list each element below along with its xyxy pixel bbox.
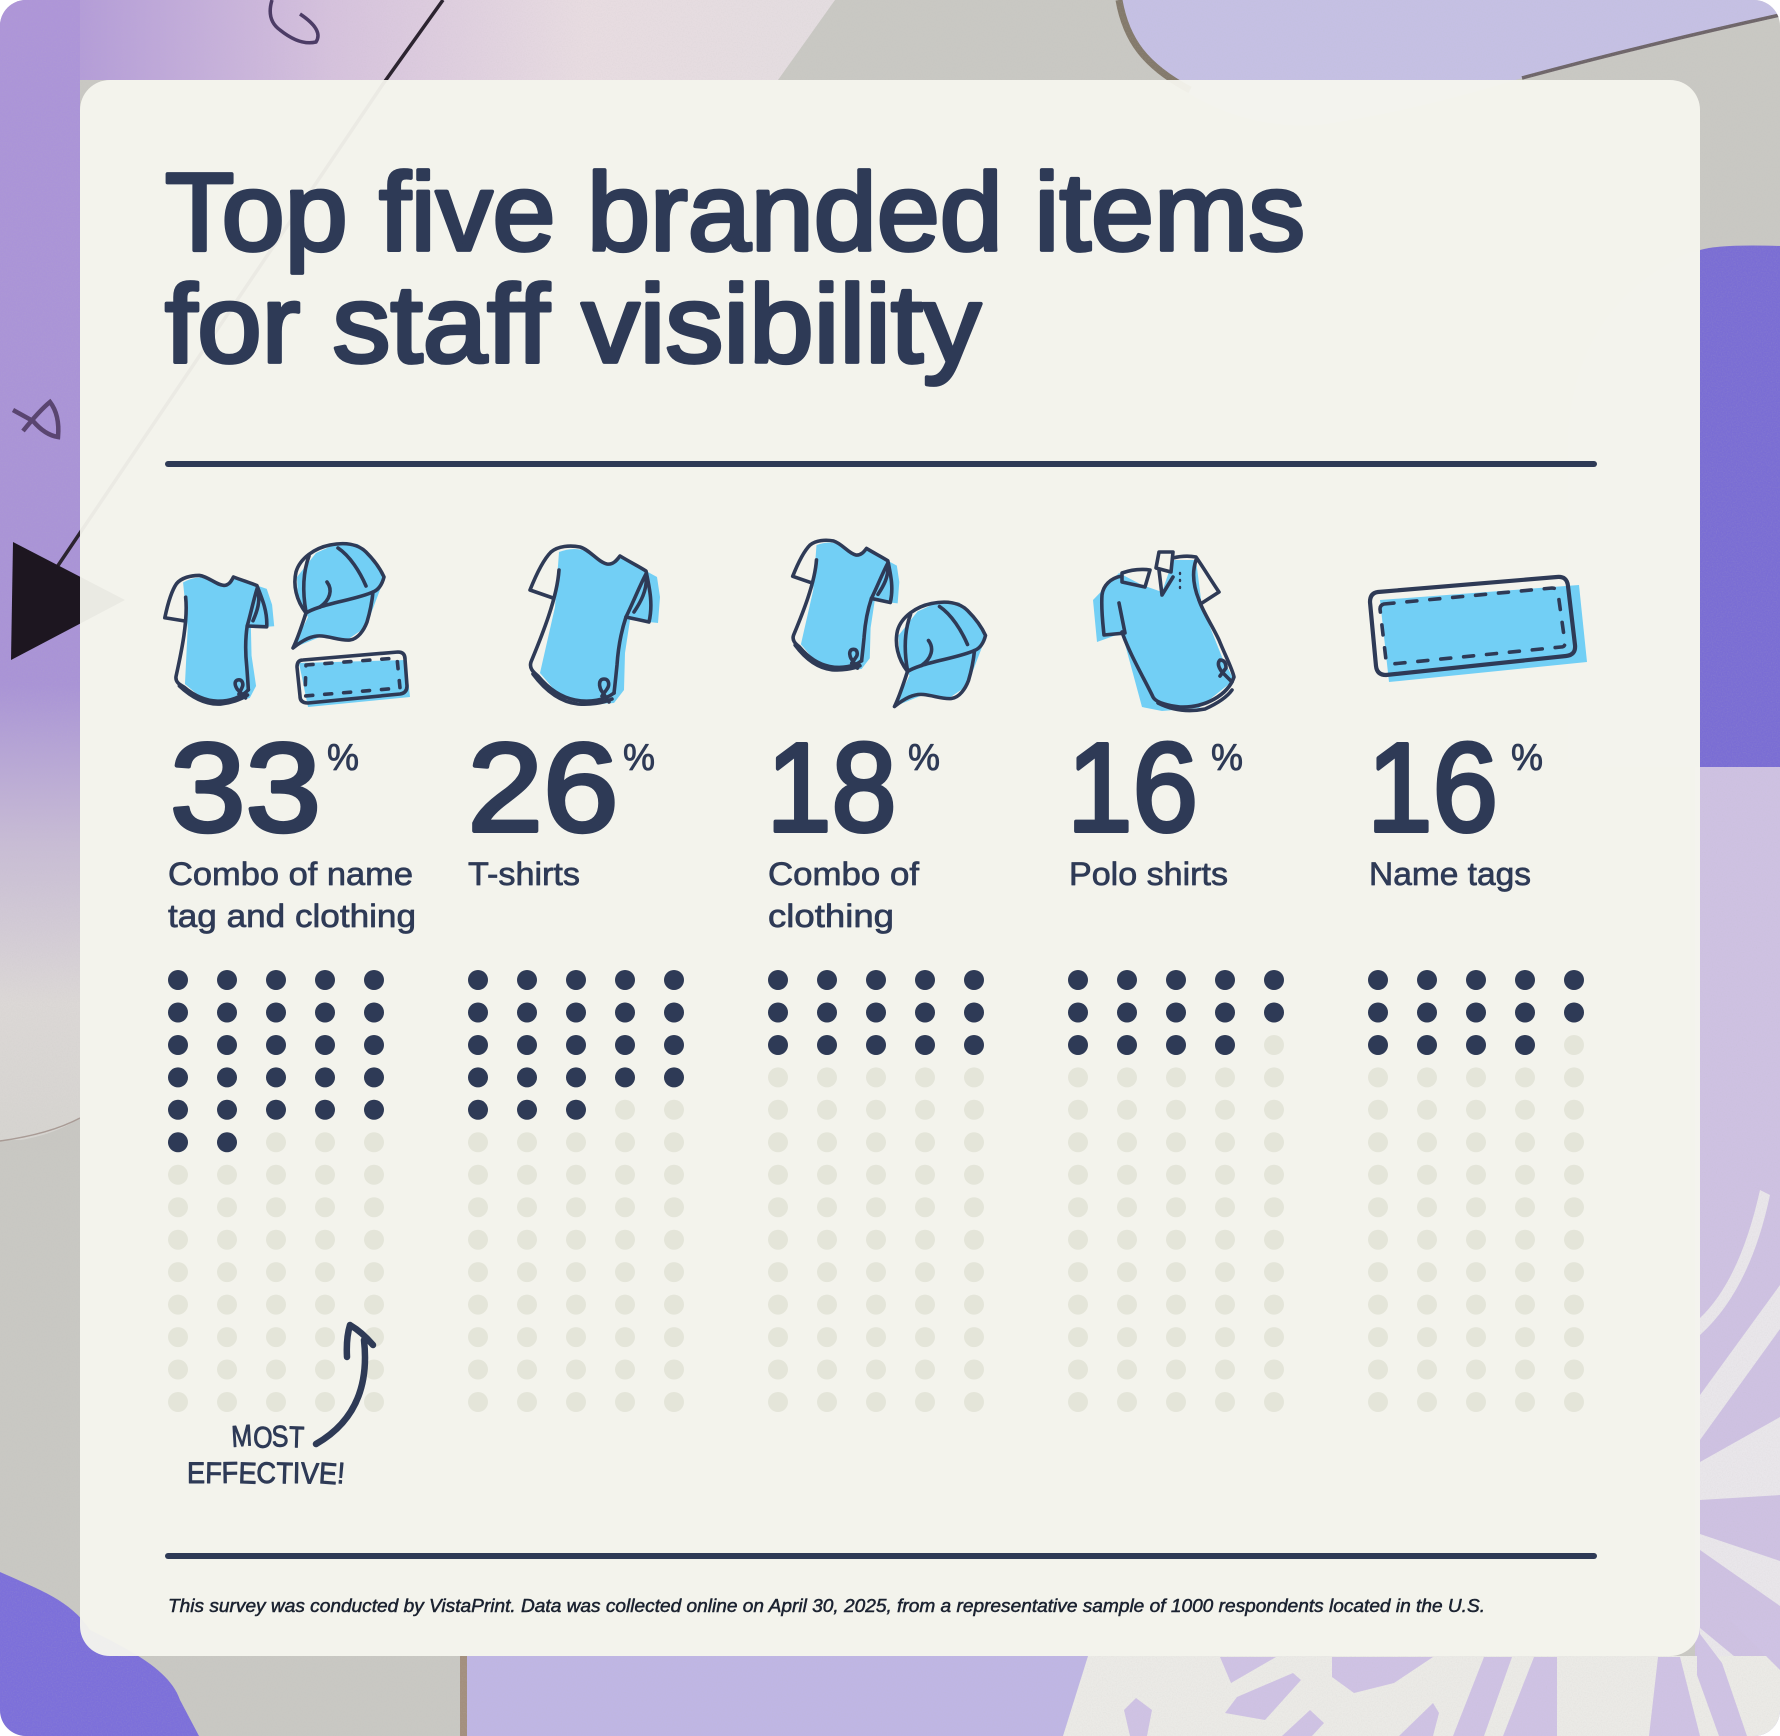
dot chart column 5 — [1378, 980, 1574, 1402]
bottom divider — [165, 1553, 1597, 1559]
top divider — [165, 461, 1597, 467]
handwritten callout: EFFECTIVE! — [187, 1457, 346, 1491]
icon: name tag — [1370, 577, 1587, 682]
percent sign: % — [327, 737, 359, 778]
stat 16%: 16 — [1067, 717, 1198, 858]
column 2: t-shirts, 26% — [468, 546, 674, 1402]
icon: t-shirt — [530, 546, 660, 705]
title: Top five branded items — [165, 151, 1305, 274]
label: Name tags — [1369, 856, 1531, 892]
column 4: polo shirts, 16% — [1067, 552, 1274, 1402]
percent sign: % — [908, 737, 940, 778]
percent sign: % — [1511, 737, 1543, 778]
handwritten callout: MOST — [230, 1420, 305, 1455]
survey footnote: This survey was conducted by VistaPrint. Data was collected online on April 30, 2025, from a representative sample of 1000 respondents located in the U.S. — [168, 1596, 1485, 1616]
column 5: name tags, 16% — [1367, 577, 1587, 1402]
arrow: most effective — [316, 1325, 373, 1444]
label: Combo of name — [168, 856, 413, 892]
stat 16%: 16 — [1367, 717, 1498, 858]
dot chart column 3 — [778, 980, 974, 1402]
dot chart column 4 — [1078, 980, 1274, 1402]
icon: t-shirt, cap and name tag — [158, 543, 410, 712]
percent sign: % — [623, 737, 655, 778]
label line 2: clothing — [768, 898, 894, 934]
label line 2: tag and clothing — [168, 898, 416, 934]
handwritten callout — [188, 1424, 344, 1485]
icon: polo shirt — [1093, 552, 1234, 711]
label: Polo shirts — [1069, 856, 1228, 892]
label: Combo of — [768, 856, 919, 892]
stat 26%: 26 — [468, 717, 618, 858]
title: for staff visibility — [165, 263, 981, 386]
column 1: combo of name tag and clothing, 33% — [158, 543, 416, 1491]
icon: t-shirt and cap — [793, 540, 986, 706]
dot chart column 1 — [178, 980, 374, 1402]
label: T-shirts — [468, 856, 580, 892]
title — [165, 151, 1305, 386]
stat 18%: 18 — [766, 717, 896, 858]
column 3: combo of clothing, 18% — [766, 540, 986, 1402]
percent sign: % — [1211, 737, 1243, 778]
dot chart column 2 — [478, 980, 674, 1402]
stat 33%: 33 — [170, 717, 321, 858]
